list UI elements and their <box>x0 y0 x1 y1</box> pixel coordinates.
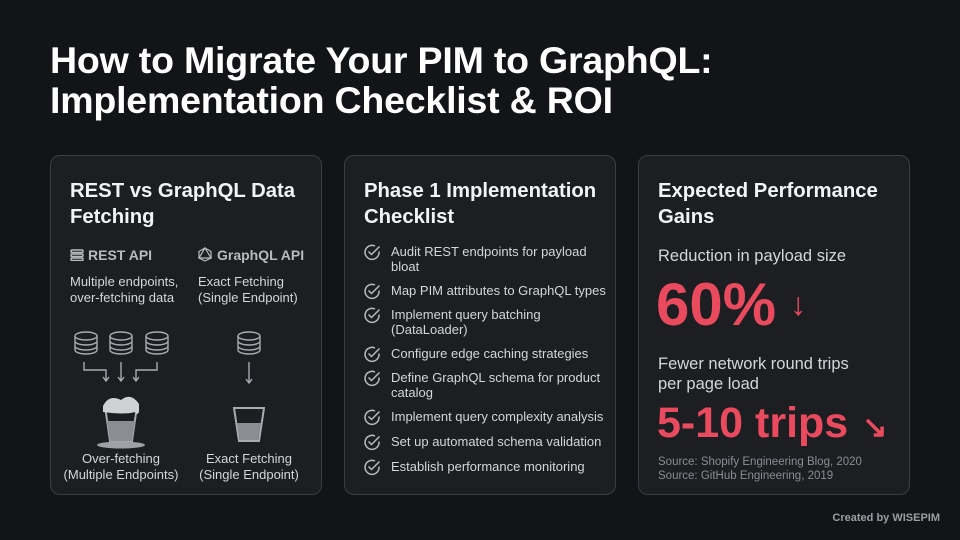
heading: Gains <box>658 206 714 228</box>
title: Implementation Checklist & ROI <box>50 79 613 121</box>
heading <box>70 180 296 228</box>
heading: Expected Performance <box>658 180 878 202</box>
label: REST API: REST API <box>88 247 152 263</box>
text: REST desc: over-fetching data <box>70 290 174 305</box>
footer credit: Created by WISEPIM <box>832 512 940 524</box>
text: REST desc: Multiple endpoints, <box>70 274 178 289</box>
caption: exact fetching <box>199 451 299 482</box>
caption: over-fetching <box>64 451 178 482</box>
checklist items: bloat <box>391 259 419 274</box>
sources: Source: GitHub Engineering, 2019 <box>658 470 833 482</box>
checklist items: (DataLoader) <box>391 322 468 337</box>
checklist items: catalog <box>391 385 433 400</box>
heading <box>658 180 878 228</box>
panel: performance gains <box>638 155 910 495</box>
text: payload label: Reduction in payload size <box>658 247 846 265</box>
panel: checklist <box>344 155 616 495</box>
text: round trips label <box>658 355 849 393</box>
caption: exact fetching: Exact Fetching <box>206 451 292 466</box>
heading: Phase 1 Implementation <box>364 180 596 202</box>
panel: REST vs GraphQL <box>50 155 322 495</box>
stat: 5-10 trips: 5-10 trips ↘ <box>657 399 887 447</box>
checklist items: Set up automated schema validation <box>391 434 601 449</box>
title <box>50 39 712 121</box>
label: GraphQL API: GraphQL API <box>217 247 304 263</box>
stat: 60%: 60% ↓ <box>656 271 806 338</box>
checklist items: Configure edge caching strategies <box>391 346 588 361</box>
text: round trips label: per page load <box>658 375 759 393</box>
heading <box>364 180 596 228</box>
checklist items: Implement query complexity analysis <box>391 409 603 424</box>
checklist items: Define GraphQL schema for product <box>391 370 600 385</box>
text: GraphQL desc: (Single Endpoint) <box>198 290 298 305</box>
caption: exact fetching: (Single Endpoint) <box>199 467 299 482</box>
sources: Source: Shopify Engineering Blog, 2020 <box>658 456 862 468</box>
caption: over-fetching: Over-fetching <box>82 451 160 466</box>
diagram: REST vs GraphQL <box>74 331 266 448</box>
title: How to Migrate Your PIM to GraphQL: <box>50 39 712 81</box>
text: round trips label: Fewer network round trips <box>658 355 849 373</box>
checklist items: Establish performance monitoring <box>391 459 585 474</box>
heading: Fetching <box>70 206 155 228</box>
text: GraphQL desc: Exact Fetching <box>198 274 284 289</box>
checklist items: Audit REST endpoints for payload <box>391 244 587 259</box>
checklist items <box>364 244 606 476</box>
heading: REST vs GraphQL Data <box>70 180 295 202</box>
text: GraphQL desc <box>198 274 298 305</box>
sources <box>658 456 862 482</box>
checklist items: Implement query batching <box>391 307 541 322</box>
text: REST desc <box>70 274 178 305</box>
heading: Checklist <box>364 206 454 228</box>
caption: over-fetching: (Multiple Endpoints) <box>64 467 178 482</box>
checklist items: Map PIM attributes to GraphQL types <box>391 283 606 298</box>
